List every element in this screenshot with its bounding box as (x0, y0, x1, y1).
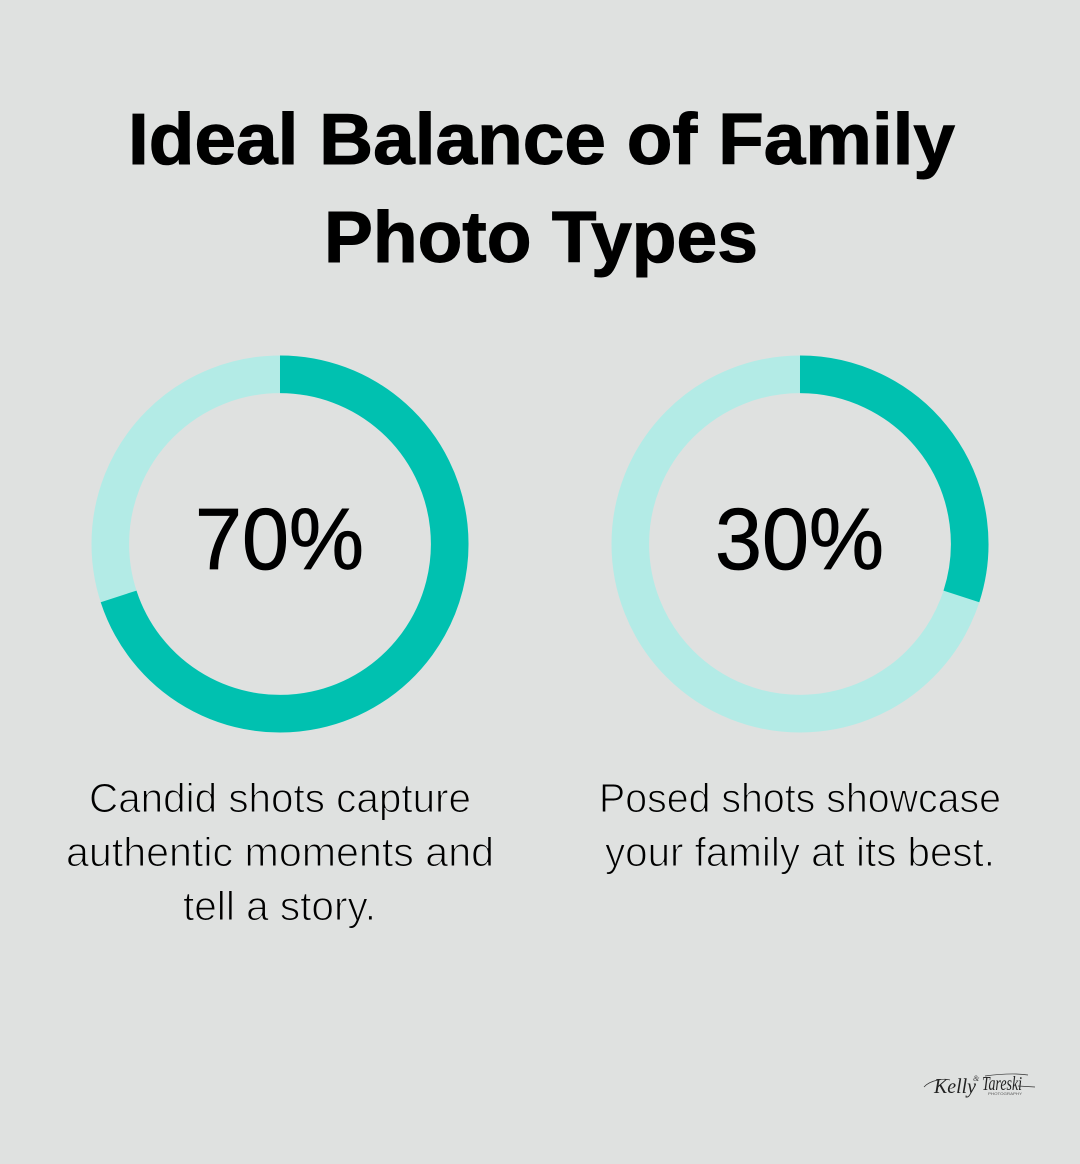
logo: Kelly & Tareski Photography signature: Kelly (933, 1074, 977, 1098)
description: posed shots: your family at its best. (605, 829, 995, 875)
value: 70%: 70% (195, 491, 364, 588)
donut chart: 30% (630, 374, 970, 714)
description: candid shots: Candid shots capture (89, 775, 471, 821)
description: candid shots: tell a story. (183, 883, 376, 929)
title (128, 100, 955, 278)
description: candid shots (66, 775, 494, 929)
title: Ideal Balance of Family (128, 100, 955, 180)
description: candid shots: authentic moments and (66, 829, 494, 875)
title: Photo Types (324, 198, 758, 278)
panel: candid shots (66, 374, 494, 929)
description: posed shots (599, 775, 1001, 875)
logo: Kelly & Tareski Photography signature: PHOTOGRAPHY (988, 1091, 1022, 1096)
value: 30%: 30% (715, 491, 884, 588)
description: posed shots: Posed shots showcase (599, 775, 1001, 821)
logo: Kelly & Tareski Photography signature: Tareski (982, 1073, 1022, 1095)
donut chart: 70% (110, 374, 450, 714)
panel: posed shots (599, 374, 1001, 875)
logo: Kelly & Tareski Photography signature: & (973, 1074, 980, 1083)
logo: Kelly & Tareski Photography signature (924, 1073, 1035, 1098)
